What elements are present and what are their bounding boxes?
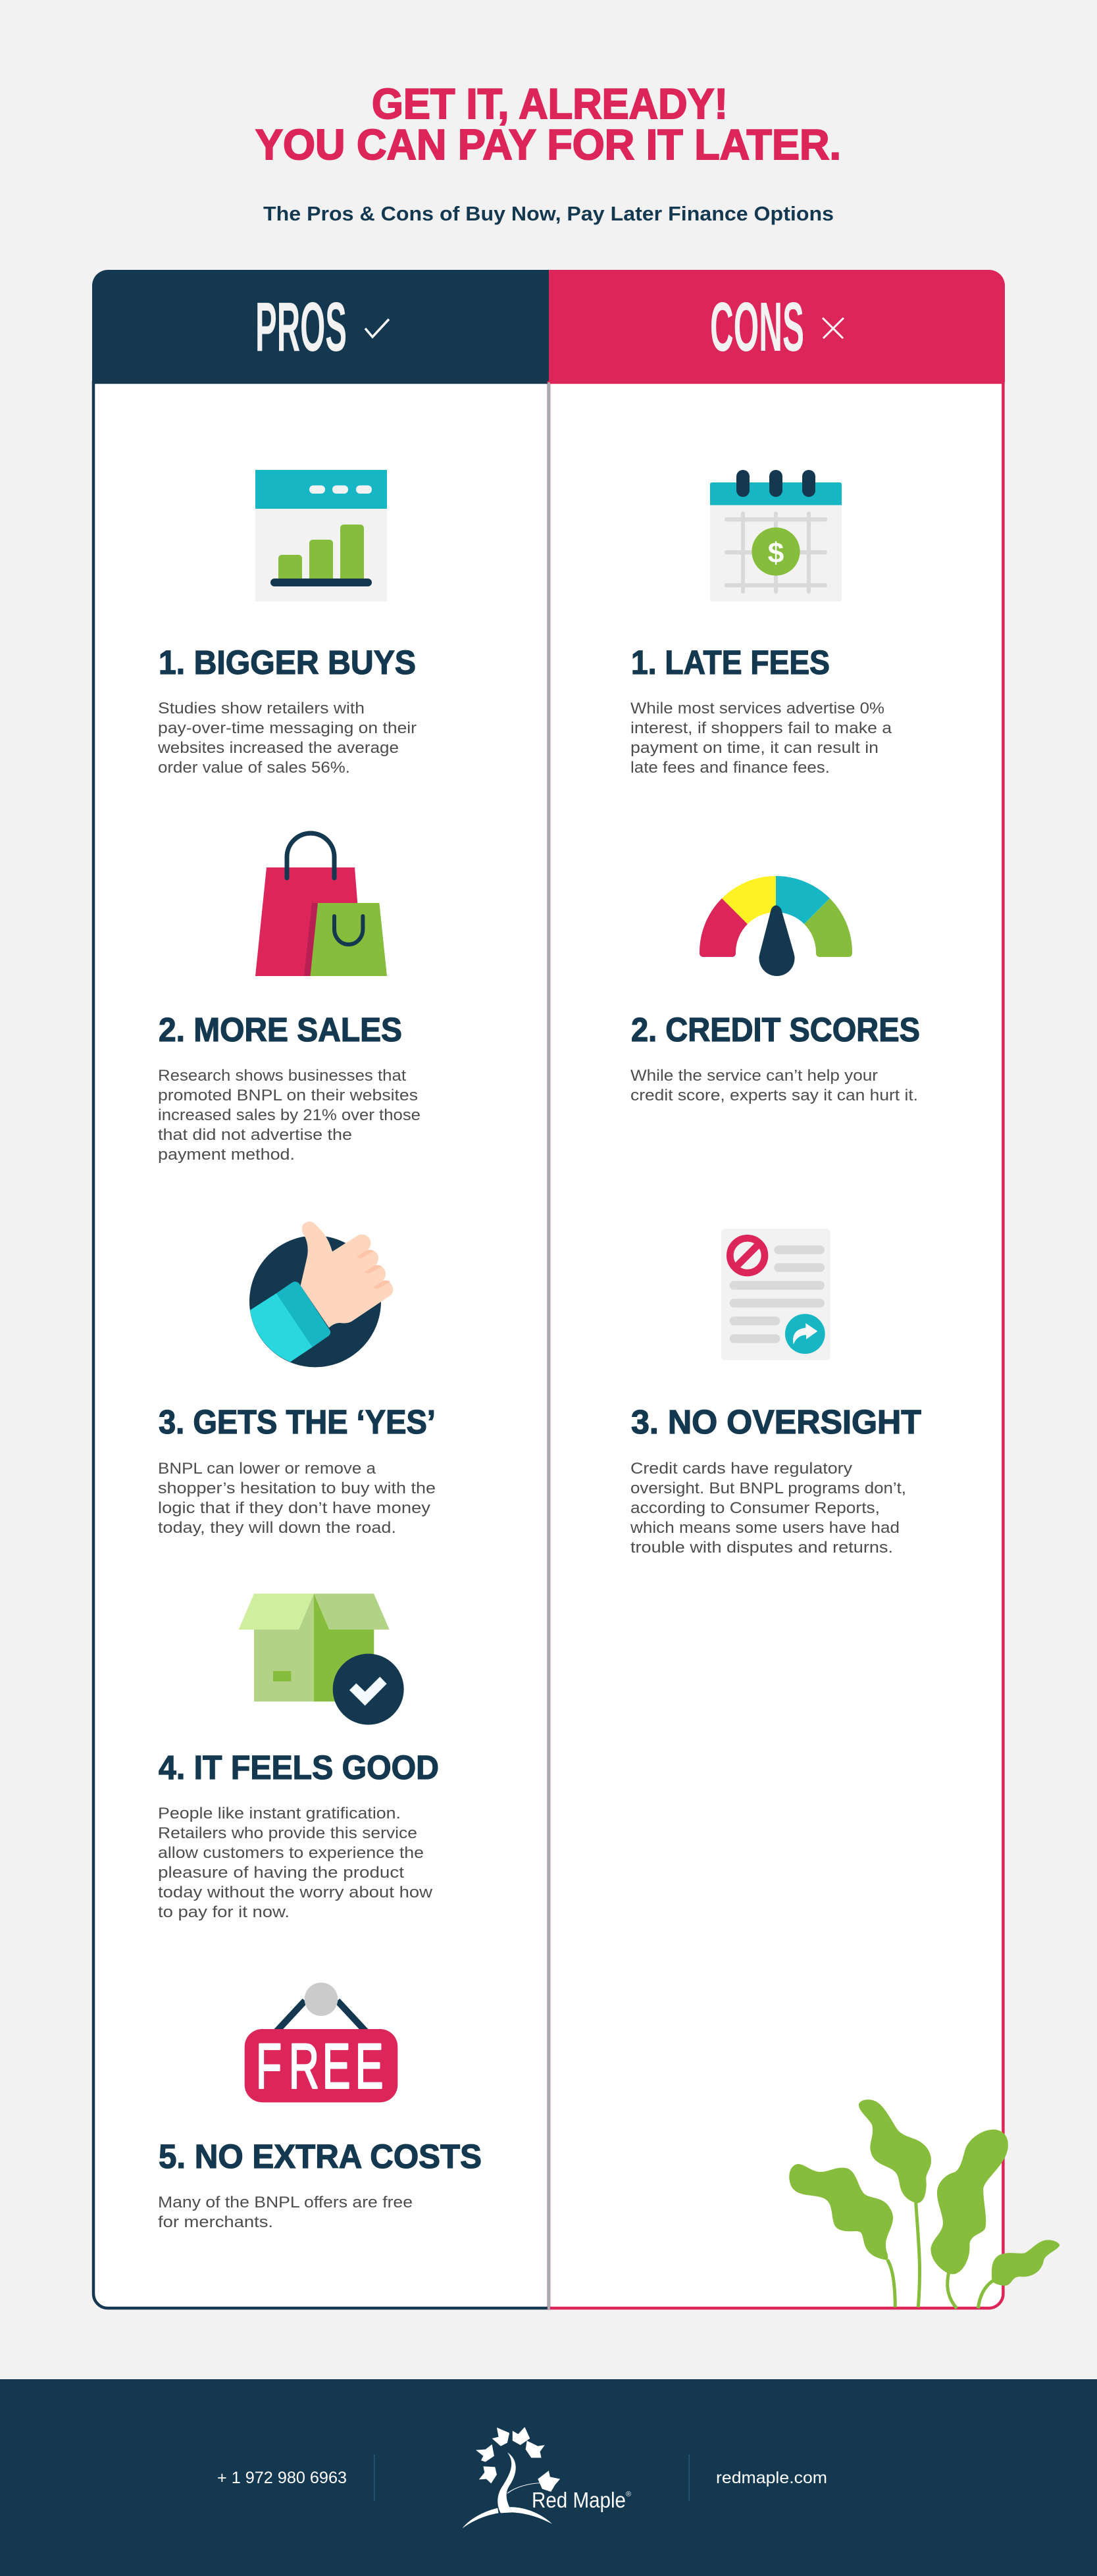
title: YOU CAN PAY FOR IT LATER. <box>255 120 841 168</box>
body text <box>158 1805 433 1921</box>
pros item 1 <box>157 470 417 777</box>
heading: late fees: 1. LATE FEES <box>631 644 830 681</box>
body text: promoted BNPL on their websites <box>158 1087 418 1104</box>
cons item 2 <box>630 876 920 1104</box>
body text: People like instant gratification. <box>158 1805 401 1822</box>
body text: trouble with disputes and returns. <box>630 1539 893 1557</box>
body text: today, they will down the road. <box>158 1519 396 1537</box>
body text: pay-over-time messaging on their <box>158 719 417 737</box>
heading: gets the yes: 3. GETS THE ‘YES’ <box>159 1403 436 1441</box>
title <box>255 80 841 168</box>
pros item 3 <box>158 1222 436 1537</box>
body text: increased sales by 21% over those <box>158 1106 421 1124</box>
divider right <box>688 2454 690 2501</box>
body text: order value of sales 56%. <box>158 759 350 777</box>
body text: according to Consumer Reports, <box>630 1499 880 1517</box>
body text: late fees and finance fees. <box>630 759 830 777</box>
icon: free sign <box>245 1982 397 2102</box>
footer band <box>0 2379 1097 2576</box>
phone number: + 1 972 980 6963 <box>217 2469 347 2487</box>
body text: websites increased the average <box>157 739 399 757</box>
body text <box>157 700 417 777</box>
body text: oversight. But BNPL programs don’t, <box>630 1480 906 1497</box>
icon: calendar with dollar <box>710 470 842 602</box>
footer <box>0 2379 1097 2576</box>
body text: Research shows businesses that <box>158 1067 406 1085</box>
panel: pros <box>92 270 549 2308</box>
body text: While the service can’t help your <box>630 1067 878 1085</box>
title: GET IT, ALREADY! <box>372 80 728 128</box>
icon: browser bar chart <box>255 470 387 602</box>
body text: for merchants. <box>158 2213 273 2231</box>
body text: logic that if they don’t have money <box>158 1499 430 1517</box>
icon: credit score gauge <box>700 876 852 976</box>
heading: no extra costs: 5. NO EXTRA COSTS <box>159 2138 482 2175</box>
pros item 5 <box>158 1982 482 2231</box>
cons item 3 <box>630 1229 921 1557</box>
body text: interest, if shoppers fail to make a <box>630 719 892 737</box>
body text <box>630 1067 918 1104</box>
pros item 4 <box>158 1593 439 1921</box>
body text: Credit cards have regulatory <box>630 1460 852 1478</box>
body text: payment method. <box>158 1146 295 1164</box>
logo: red maple <box>463 2427 631 2529</box>
body text: that did not advertise the <box>158 1126 352 1144</box>
body text: allow customers to experience the <box>158 1844 424 1862</box>
website: redmaple.com <box>716 2469 827 2487</box>
body text: Many of the BNPL offers are free <box>158 2194 413 2211</box>
body text: pleasure of having the product <box>158 1864 404 1882</box>
icon: shopping bags <box>255 833 387 976</box>
icon: thumbs up <box>249 1222 393 1367</box>
body text: today without the worry about how <box>158 1884 433 1901</box>
body text <box>158 2194 413 2231</box>
heading: credit scores: 2. CREDIT SCORES <box>631 1011 920 1048</box>
cons card background <box>549 382 1003 2308</box>
body text <box>630 700 892 777</box>
pros card background <box>93 382 549 2308</box>
icon: plant <box>789 2099 1059 2308</box>
pros header band <box>92 270 549 382</box>
body text: Retailers who provide this service <box>158 1824 417 1842</box>
subtitle: The Pros & Cons of Buy Now, Pay Later Finance Options <box>263 202 834 225</box>
body text <box>158 1460 436 1537</box>
body text: payment on time, it can result in <box>630 739 879 757</box>
heading: no oversight: 3. NO OVERSIGHT <box>631 1403 921 1441</box>
heading: more sales: 2. MORE SALES <box>159 1011 402 1048</box>
body text <box>158 1067 421 1164</box>
icon: free sign: FREE <box>256 2031 383 2102</box>
body text: shopper’s hesitation to buy with the <box>158 1480 436 1497</box>
panel: pros: PROS <box>255 288 347 366</box>
cons item 1 <box>630 470 892 777</box>
heading: bigger buys: 1. BIGGER BUYS <box>159 644 416 681</box>
cons header band <box>549 270 1005 382</box>
body text: to pay for it now. <box>158 1903 290 1921</box>
center divider <box>548 382 550 2309</box>
panel: cons: CONS <box>710 288 804 366</box>
icon: cross mark <box>823 318 844 338</box>
logo: red maple: Red Maple <box>532 2488 626 2512</box>
body text: Studies show retailers with <box>158 700 365 717</box>
pros item 2 <box>158 833 421 1164</box>
body text: which means some users have had <box>630 1519 900 1537</box>
panel: cons <box>549 270 1005 2308</box>
icon: calendar with dollar: $ <box>768 537 784 569</box>
body text: While most services advertise 0% <box>630 700 884 717</box>
divider left <box>374 2454 375 2501</box>
icon: check mark <box>365 319 389 337</box>
heading: it feels good: 4. IT FEELS GOOD <box>159 1749 439 1786</box>
icon: open box with check <box>239 1593 404 1725</box>
logo: red maple: ® <box>626 2490 631 2498</box>
body text: BNPL can lower or remove a <box>158 1460 376 1478</box>
icon: document with prohibition sign <box>721 1229 830 1360</box>
body text <box>630 1460 906 1557</box>
body text: credit score, experts say it can hurt it. <box>630 1087 918 1104</box>
